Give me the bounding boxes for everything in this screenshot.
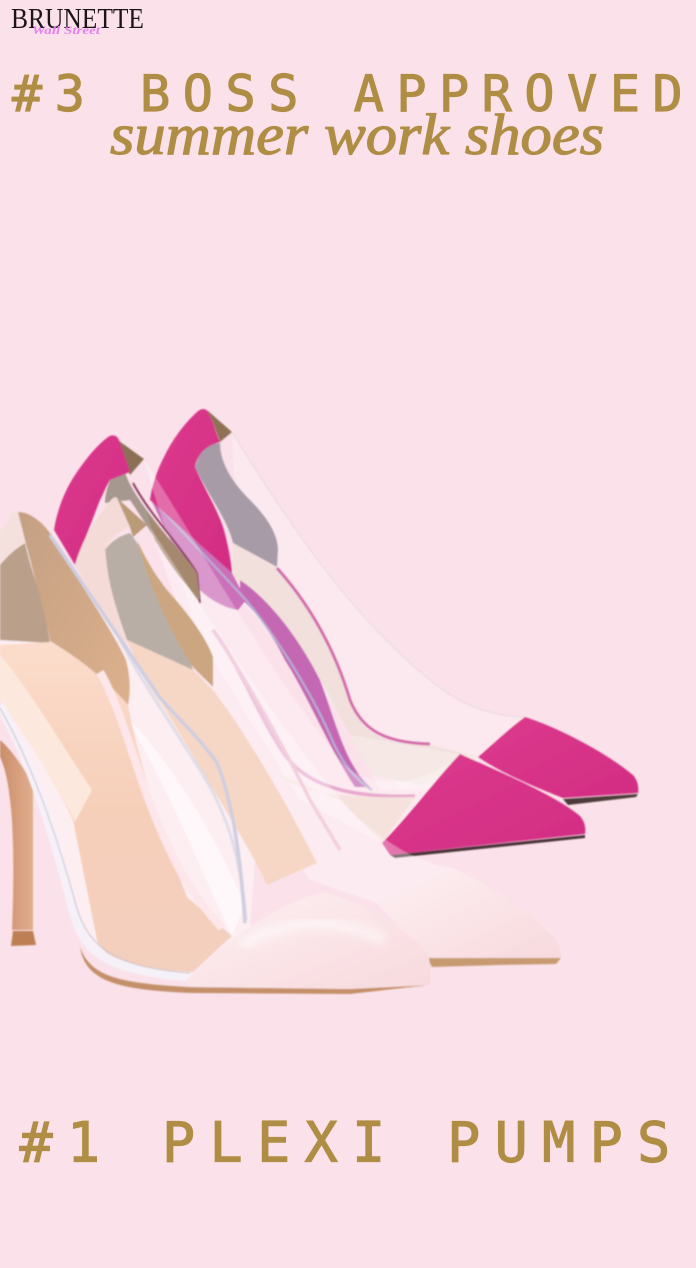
illustration: four plexi pumps bbox=[0, 409, 638, 994]
stiletto heel bbox=[0, 740, 36, 946]
logo: BRUNETTE bbox=[11, 3, 144, 35]
shoe: middle nude pump bbox=[75, 497, 561, 967]
shoe: front nude pump bbox=[0, 511, 431, 994]
subtitle script: summer work shoes bbox=[110, 102, 604, 167]
caption: #1 PLEXI PUMPS bbox=[20, 1110, 685, 1174]
title: #3 BOSS APPROVED bbox=[12, 65, 695, 123]
shoe: back pink pump bbox=[150, 409, 638, 805]
logo: Wall Street bbox=[32, 23, 101, 37]
shoe: middle pink pump bbox=[54, 435, 585, 858]
